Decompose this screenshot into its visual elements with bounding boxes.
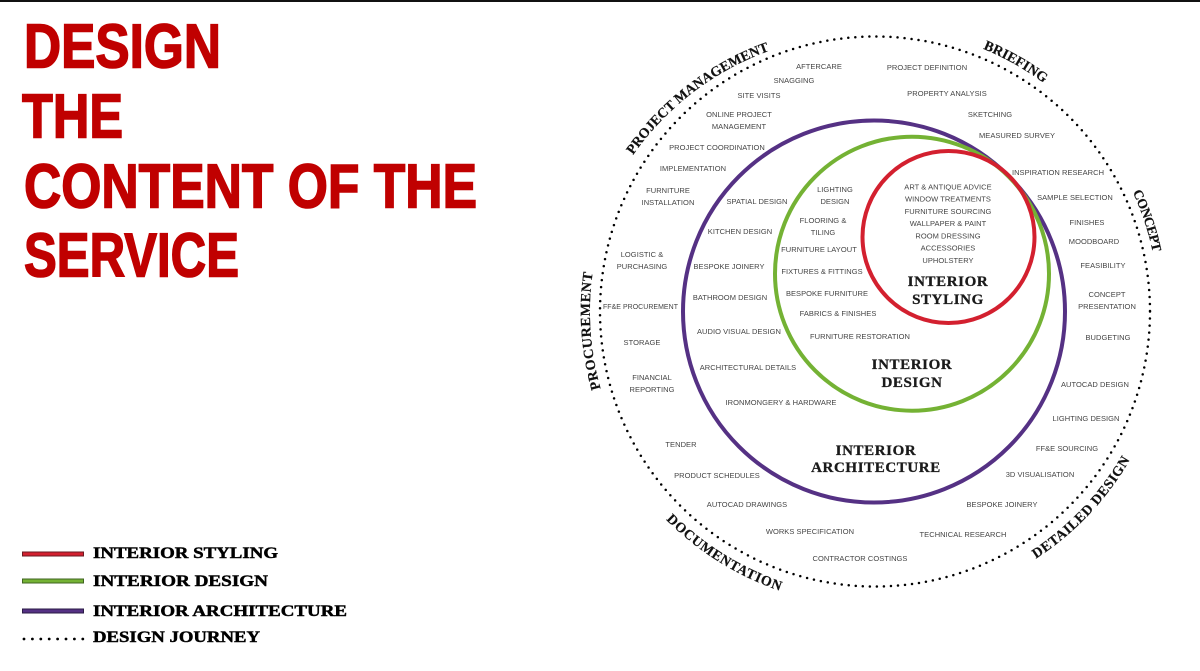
interior styling service list: ROOM DRESSING [915, 232, 981, 240]
design journey service list: PROJECT DEFINITION [887, 63, 967, 72]
legend: interior styling [22, 545, 278, 562]
design journey service list: STORAGE [624, 338, 660, 347]
legend: interior design: INTERIOR DESIGN [93, 573, 268, 590]
heading: interior styling [908, 274, 988, 308]
heading: interior architecture [811, 443, 941, 476]
stage label: briefing: BRIEFING [983, 40, 1048, 82]
design journey service list: MANAGEMENT [712, 122, 766, 131]
stage label: detailed design: DETAILED DESIGN [1030, 455, 1130, 559]
title: DESIGN [24, 12, 221, 82]
interior styling ring [862, 151, 1034, 323]
design journey service list: MEASURED SURVEY [979, 131, 1055, 140]
interior architecture service list: BESPOKE JOINERY [693, 262, 765, 271]
design journey service list: CONTRACTOR COSTINGS [813, 554, 907, 563]
interior design service list: FURNITURE RESTORATION [810, 332, 910, 341]
interior styling service list: ACCESSORIES [921, 244, 975, 252]
title [22, 12, 477, 290]
circle diagram [580, 35, 1162, 590]
legend: interior design [22, 573, 268, 590]
heading: interior architecture: INTERIOR [836, 443, 916, 459]
interior styling service list: FURNITURE SOURCING [905, 207, 991, 216]
interior styling service list [904, 182, 992, 265]
design journey service list: PRESENTATION [1078, 302, 1136, 311]
design journey service list [603, 62, 1136, 563]
stage label: documentation: DOCUMENTATION [666, 513, 783, 590]
interior architecture service list: SPATIAL DESIGN [726, 197, 788, 206]
stage label: concept: CONCEPT [1134, 190, 1162, 251]
design journey service list: PURCHASING [617, 262, 667, 271]
design journey service list: SKETCHING [968, 110, 1012, 119]
design journey service list: WORKS SPECIFICATION [766, 527, 854, 536]
design journey service list: CONCEPT [1088, 290, 1126, 299]
interior styling service list: UPHOLSTERY [922, 256, 974, 265]
design journey service list: PRODUCT SCHEDULES [674, 471, 760, 480]
interior architecture service list: KITCHEN DESIGN [708, 227, 772, 236]
design journey service list: SNAGGING [774, 76, 815, 85]
interior design service list: FLOORING & [800, 216, 846, 225]
interior design service list: FABRICS & FINISHES [800, 309, 876, 318]
interior architecture service list: IRONMONGERY & HARDWARE [726, 398, 836, 407]
design journey service list: AUTOCAD DESIGN [1061, 380, 1129, 389]
interior architecture service list [693, 197, 836, 407]
dotted design journey ring [600, 36, 1150, 586]
heading: interior design [872, 357, 952, 391]
design journey service list: BESPOKE JOINERY [966, 500, 1038, 509]
design journey service list: TECHNICAL RESEARCH [920, 530, 1006, 539]
legend: interior architecture: INTERIOR ARCHITECTURE [93, 603, 347, 620]
design journey service list: FURNITURE [646, 186, 690, 195]
design journey service list: SITE VISITS [737, 91, 781, 100]
design journey service list: SAMPLE SELECTION [1037, 193, 1113, 202]
design journey service list: INSPIRATION RESEARCH [1012, 168, 1104, 177]
heading: interior architecture: ARCHITECTURE [811, 460, 941, 476]
interior design ring [775, 137, 1049, 411]
title: SERVICE [24, 222, 239, 290]
interior architecture service list: BATHROOM DESIGN [693, 293, 767, 302]
interior design service list: TILING [811, 228, 835, 237]
design journey service list: IMPLEMENTATION [660, 164, 726, 173]
interior design service list [781, 185, 910, 341]
interior styling service list: ART & ANTIQUE ADVICE [904, 182, 992, 192]
stage label: project management: PROJECT MANAGEMENT [626, 42, 768, 155]
legend: interior architecture [22, 603, 347, 620]
design journey service list: FF&E SOURCING [1036, 444, 1098, 453]
interior design service list: BESPOKE FURNITURE [786, 289, 868, 298]
stage label: procurement: PROCUREMENT [580, 272, 601, 391]
legend [22, 545, 347, 646]
design journey service list: REPORTING [630, 385, 675, 394]
design journey service list: INSTALLATION [642, 198, 694, 207]
design journey service list: MOODBOARD [1069, 237, 1120, 246]
legend: design journey: DESIGN JOURNEY [93, 629, 260, 646]
design journey service list: LOGISTIC & [621, 250, 663, 259]
interior architecture service list: ARCHITECTURAL DETAILS [700, 363, 796, 372]
design journey service list: 3D VISUALISATION [1006, 470, 1074, 479]
interior design service list: DESIGN [820, 197, 850, 206]
design journey service list: ONLINE PROJECT [706, 110, 772, 119]
design journey service list: FINANCIAL [632, 373, 672, 382]
design journey service list: FINISHES [1070, 218, 1104, 227]
design journey service list: FEASIBILITY [1080, 261, 1126, 270]
design journey service list: PROPERTY ANALYSIS [907, 89, 987, 98]
design journey service list: BUDGETING [1085, 333, 1131, 342]
interior styling service list: WALLPAPER & PAINT [910, 219, 987, 228]
interior design service list: FIXTURES & FITTINGS [781, 267, 863, 276]
design journey service list: LIGHTING DESIGN [1052, 414, 1120, 423]
heading: interior design: INTERIOR [872, 357, 952, 373]
interior design service list: LIGHTING [817, 185, 853, 194]
interior architecture service list: AUDIO VISUAL DESIGN [697, 327, 781, 336]
design journey service list: FF&E PROCUREMENT [603, 302, 678, 311]
interior styling service list: WINDOW TREATMENTS [905, 194, 991, 204]
heading: interior design: DESIGN [881, 375, 943, 391]
interior architecture ring [683, 120, 1065, 502]
legend: interior styling: INTERIOR STYLING [93, 545, 278, 562]
design journey service list: AFTERCARE [796, 62, 842, 71]
heading: interior styling: INTERIOR [908, 274, 988, 290]
interior design service list: FURNITURE LAYOUT [781, 245, 857, 254]
design journey service list: PROJECT COORDINATION [669, 143, 765, 152]
title: THE [22, 82, 123, 152]
design journey service list: TENDER [665, 440, 697, 449]
heading: interior styling: STYLING [912, 292, 984, 308]
design journey service list: AUTOCAD DRAWINGS [707, 500, 787, 509]
title: CONTENT OF THE [24, 152, 477, 222]
